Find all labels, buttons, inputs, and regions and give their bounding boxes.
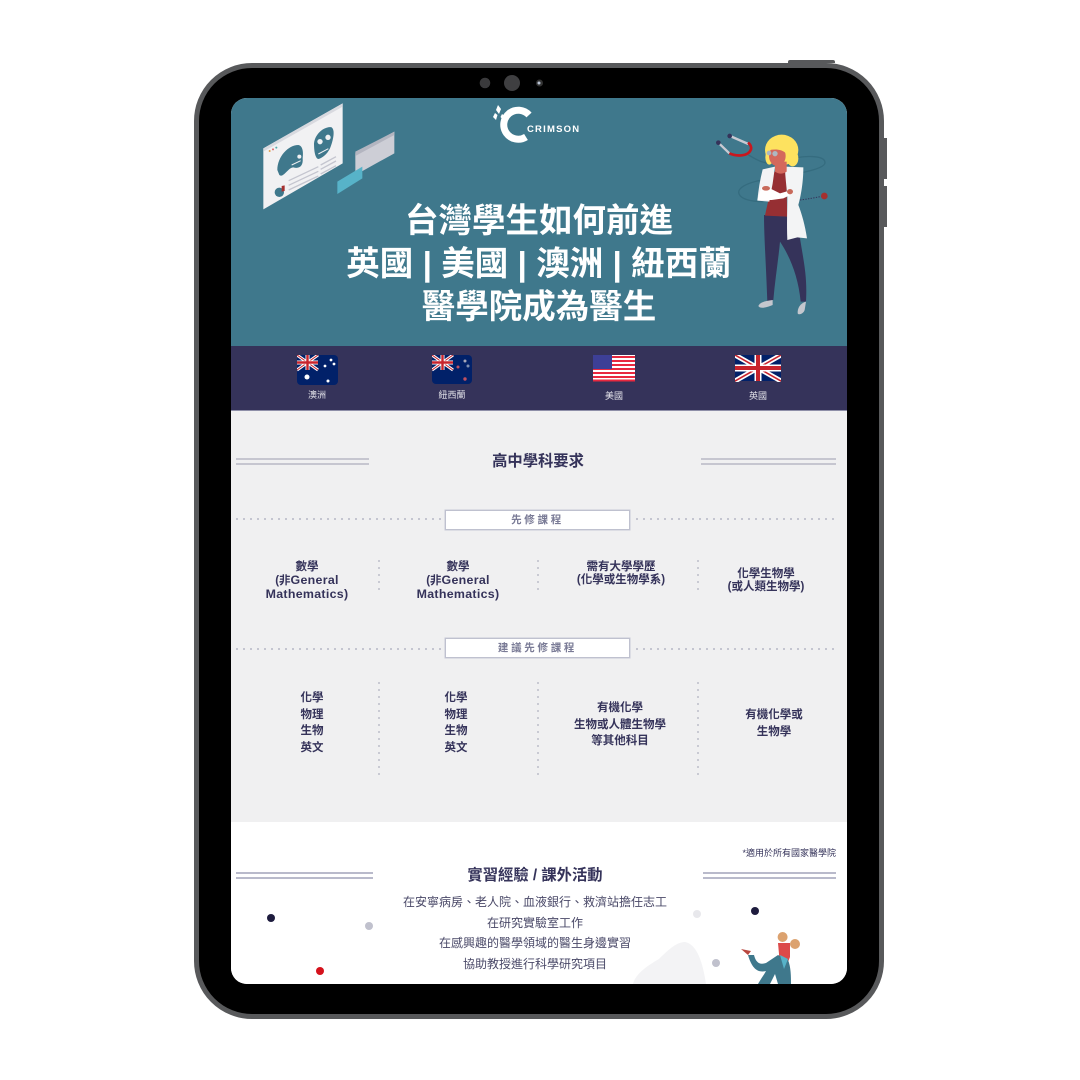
device side buttons [788,60,887,227]
front cameras [480,75,543,91]
recommended: United States: 生物或人體生物學 [574,718,666,730]
recommended: United Kingdom: 生物學 [757,726,791,738]
prerequisite: Australia [266,560,348,601]
prerequisite: United States [577,560,665,586]
label: 紐西蘭: 紐西蘭 [438,390,466,400]
label: prerequisites [445,510,630,530]
prerequisite: Australia: Mathematics) [266,587,348,601]
panel: high school subject requirements [231,411,847,822]
list of activities: 在研究實驗室工作 [487,916,583,930]
label: prerequisites: 先修課程 [511,514,564,526]
logo: Crimson: CRIMSON [527,124,580,135]
prerequisite: United Kingdom: (或人類生物學) [728,581,804,593]
prerequisite: New Zealand: (非General [426,573,490,587]
prerequisite: United States: 需有大學學歷 [586,561,655,573]
recommended: United Kingdom [745,708,803,738]
panel: internship experience [231,822,847,984]
screen [231,98,847,984]
title: 英國 | 美國 | 澳洲 | 紐西蘭 [346,246,732,283]
illustration: doctor with stethoscope [716,134,828,314]
list of activities: 在安寧病房、老人院、血液銀行、救濟站擔任志工 [403,895,667,909]
recommended: New Zealand [444,691,468,754]
flag: Australia [297,355,338,385]
list of activities [403,895,667,970]
label: 澳洲: 澳洲 [308,390,326,400]
country nav bar [231,346,847,411]
list of activities: 在感興趣的醫學領域的醫生身邊實習 [439,936,631,950]
title: 醫學院成為醫生 [422,289,656,326]
recommended: United States [574,701,666,747]
recommended: New Zealand: 英文 [444,742,468,754]
prerequisite: New Zealand [417,560,499,601]
title: 台灣學生如何前進 [405,203,673,240]
header panel [231,98,847,346]
heading: high school requirements: 高中學科要求 [492,453,584,470]
label: recommended prerequisites [445,638,630,658]
prerequisite: Australia: 數學 [295,561,318,573]
prerequisite: United States: (化學或生物學系) [577,574,665,586]
list of activities: 協助教授進行科學研究項目 [463,956,607,970]
prerequisite: New Zealand: Mathematics) [417,587,499,601]
note: applies to all countries: *適用於所有國家醫學院 [742,848,836,858]
label: recommended prerequisites: 建議先修課程 [498,642,577,654]
recommended: Australia: 化學 [300,692,324,704]
label: 英國: 英國 [749,391,767,401]
illustration: skull x-ray screens [263,103,394,210]
flag: United Kingdom [735,355,781,382]
title [346,202,732,326]
tablet device frame [194,63,884,1019]
recommended: United States: 等其他科目 [591,735,649,747]
prerequisite: United Kingdom: 化學生物學 [737,568,795,580]
decorative blob [633,942,706,984]
prerequisite: United Kingdom [728,567,804,593]
recommended: Australia: 物理 [300,708,324,720]
recommended: United States: 有機化學 [597,702,643,714]
illustration: woman gesturing [741,932,800,984]
prerequisite: Australia: (非General [275,573,339,587]
recommended: Australia [300,691,324,754]
logo: Crimson [493,105,580,143]
recommended: New Zealand: 生物 [444,725,468,737]
prerequisite: New Zealand: 數學 [446,561,469,573]
flag: United States [593,355,635,382]
decorative dots [267,907,759,975]
label: 美國: 美國 [605,391,623,401]
recommended: United Kingdom: 有機化學或 [745,709,803,721]
recommended: Australia: 英文 [300,742,324,754]
recommended: Australia: 生物 [300,725,324,737]
recommended: New Zealand: 物理 [444,708,468,720]
heading: internship and extracurriculars: 實習經驗 / 課外活動 [467,867,603,884]
recommended: New Zealand: 化學 [444,692,468,704]
flag: New Zealand [432,355,472,384]
